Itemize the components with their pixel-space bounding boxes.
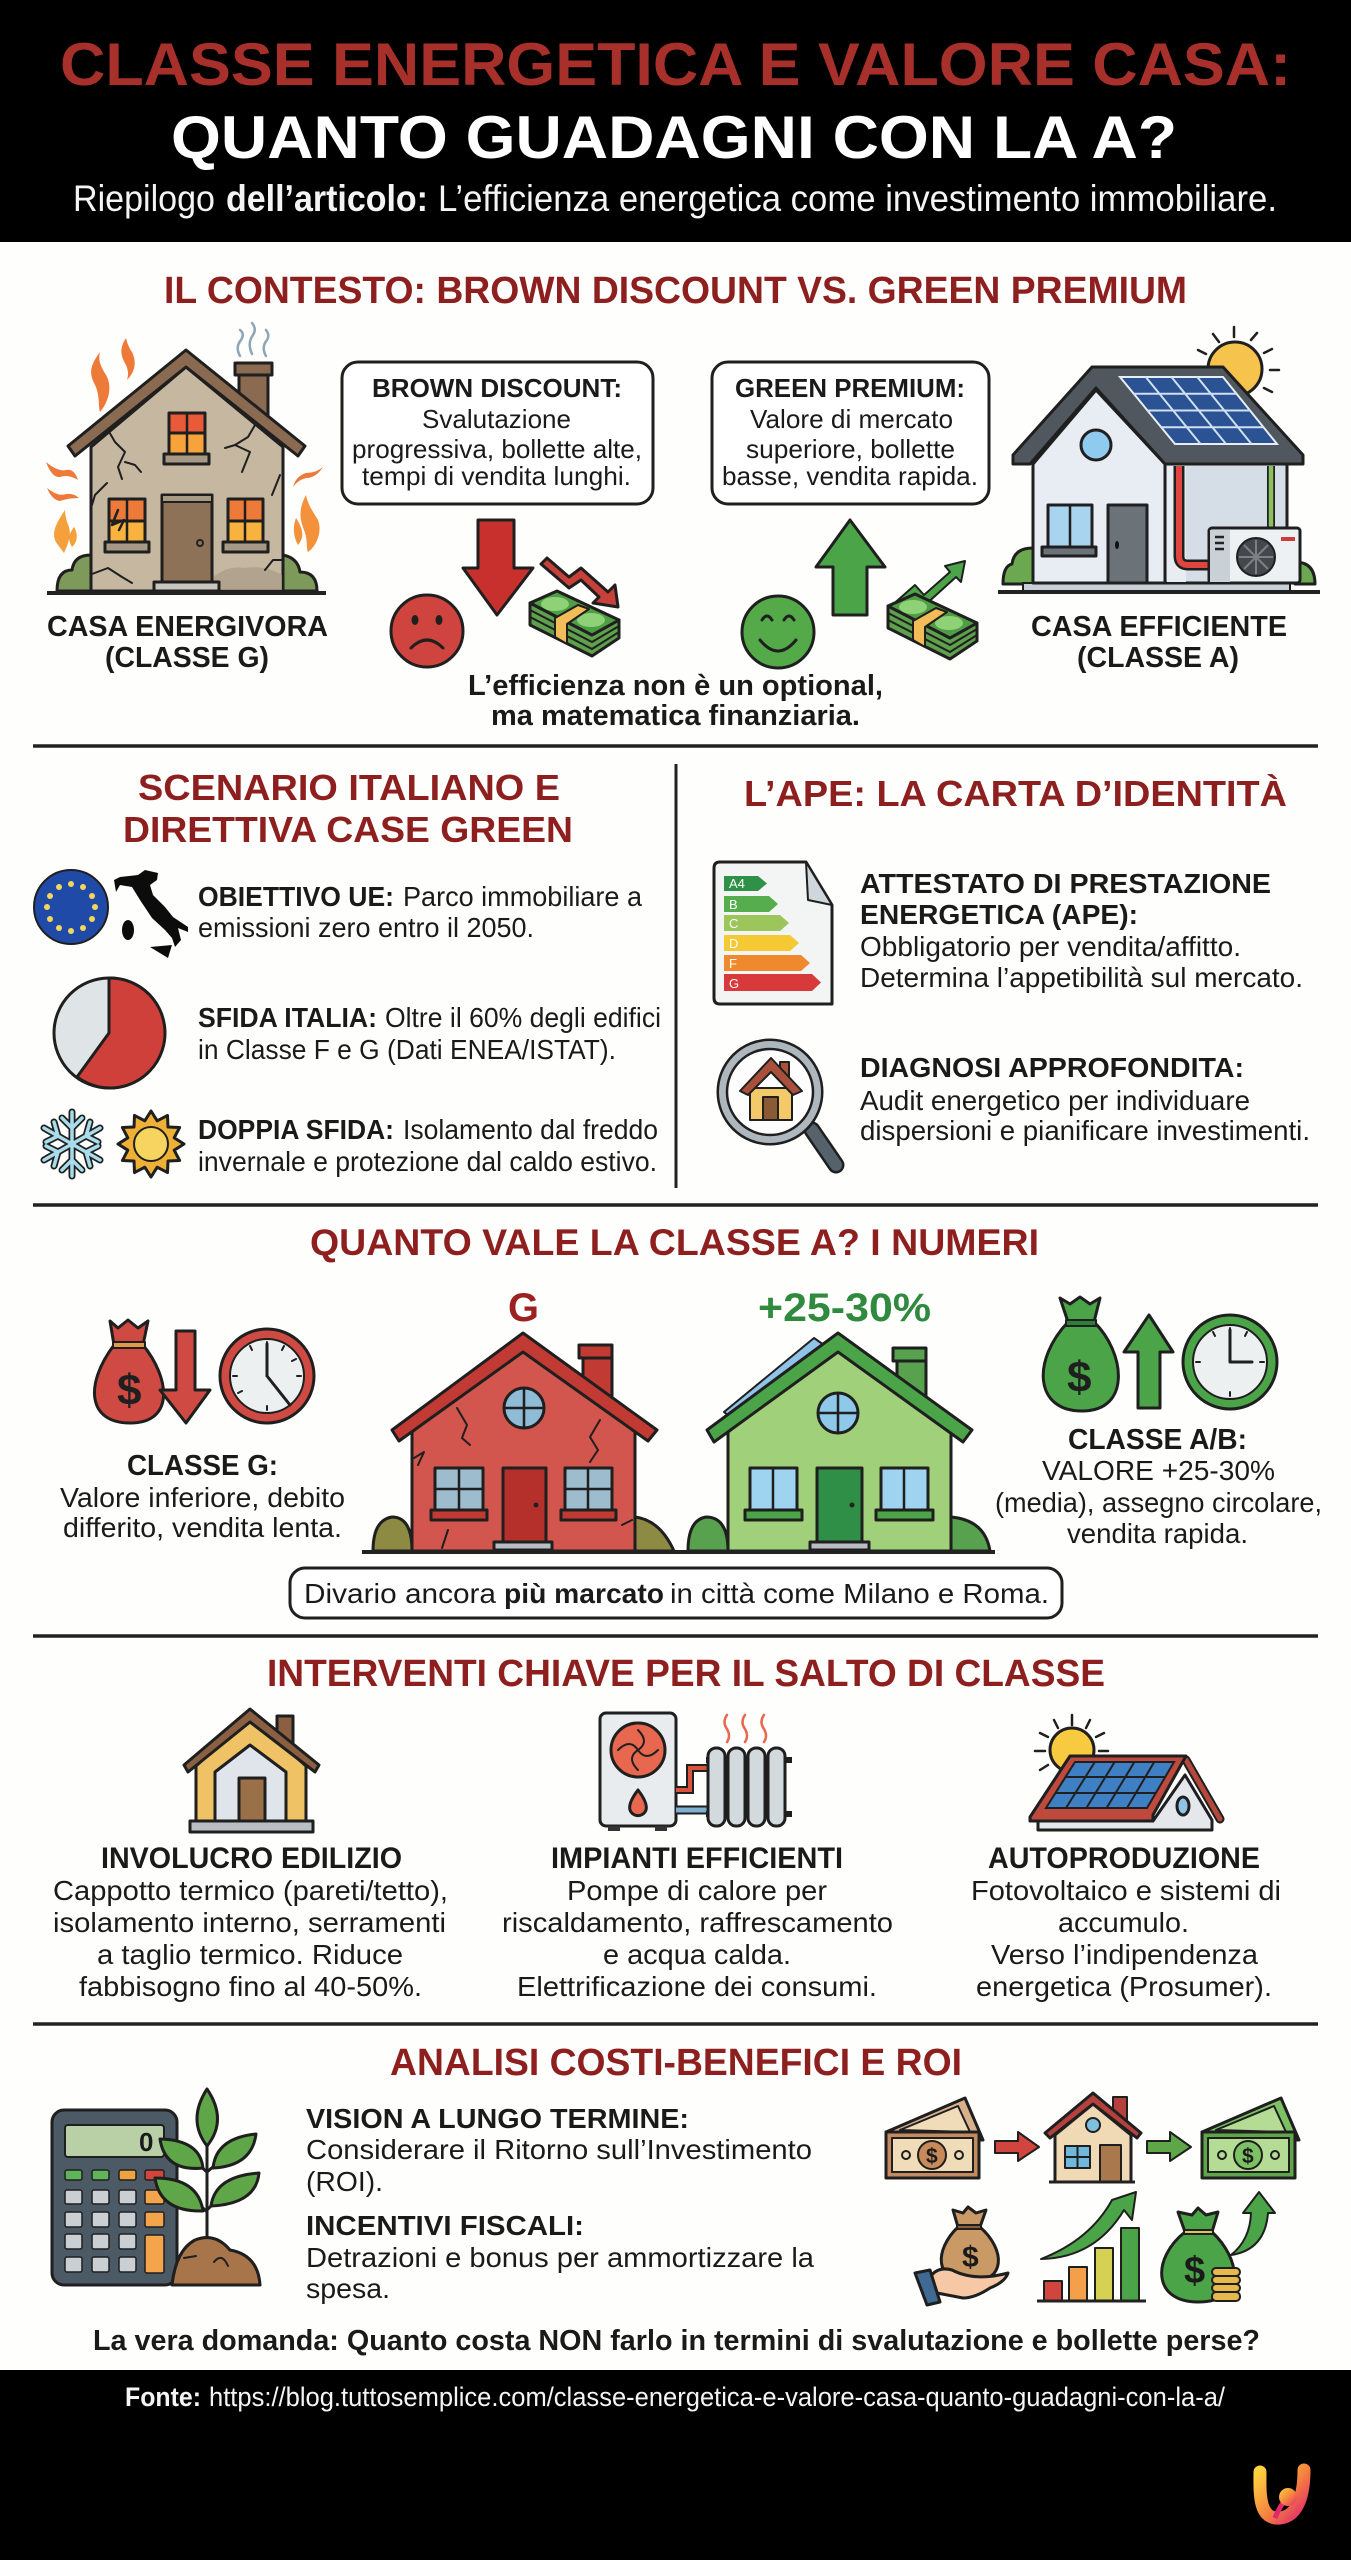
text: impianti efficienti: IMPIANTI EFFICIENTI	[551, 1842, 843, 1875]
header band	[0, 0, 1351, 242]
text: diagnosi: DIAGNOSI APPROFONDITA:	[860, 1052, 1244, 1083]
arrow: green right	[1147, 2132, 1191, 2161]
heading: scenario italiano	[123, 767, 573, 850]
icon: energy-wasting house class G	[46, 323, 326, 593]
callout: brown discount	[342, 362, 653, 504]
text: incentivi fiscali: Detrazioni e bonus per ammortizzare la	[306, 2242, 814, 2273]
text: classe A/B: CLASSE A/B:	[1068, 1424, 1247, 1456]
footer band	[0, 2370, 1351, 2560]
callout: green premium: GREEN PREMIUM:	[735, 373, 965, 403]
text: attestato: Determina l’appetibilità sul mercato.	[860, 962, 1303, 993]
heading: analisi: ANALISI COSTI-BENEFICI E ROI	[390, 2042, 962, 2084]
callout: green premium: superiore, bollette	[746, 434, 955, 464]
text: involucro edilizio: INVOLUCRO EDILIZIO	[101, 1842, 402, 1875]
heading: quanto vale: QUANTO VALE LA CLASSE A? I NUMERI	[310, 1222, 1039, 1263]
icon: energy label document: F	[729, 956, 737, 971]
icon: green banknotes: $	[1242, 2145, 1254, 2168]
icon: rising cash	[888, 561, 977, 659]
text: impianti efficienti: e acqua calda.	[603, 1939, 791, 1970]
label: casa efficiente: (CLASSE A)	[1077, 642, 1239, 674]
text: involucro edilizio: a taglio termico. Riduce	[97, 1939, 403, 1970]
icon: heat pump and radiator	[600, 1713, 792, 1831]
icon: efficient house class A	[998, 327, 1320, 592]
icon: green bag arrow clock	[1043, 1297, 1277, 1411]
text: diagnosi	[860, 1052, 1310, 1146]
arrow: red right	[995, 2132, 1039, 2161]
icon: red money bag arrow clock	[94, 1320, 314, 1423]
icon: insulated house	[184, 1709, 319, 1832]
subtitle	[73, 178, 1277, 219]
text: attestato: ATTESTATO DI PRESTAZIONE	[860, 868, 1271, 899]
text: vision a lungo termine: (ROI).	[306, 2166, 383, 2197]
text: sfida italia: SFIDA ITALIA:	[198, 1002, 377, 1033]
text: doppia sfida: invernale e protezione dal caldo estivo.	[198, 1146, 657, 1177]
icon: solar roof	[1030, 1715, 1220, 1830]
label: casa energivora	[47, 611, 328, 674]
icon: calculator and plant	[52, 2089, 260, 2285]
icon: sad face	[391, 595, 463, 667]
callout: brown discount: BROWN DISCOUNT:	[372, 373, 622, 403]
subtitle: L’efficienza energetica come investimento immobiliare.	[438, 178, 1277, 219]
text: involucro edilizio: Cappotto termico (pareti/tetto),	[53, 1875, 448, 1906]
text: impianti efficienti: Pompe di calore per	[567, 1875, 827, 1906]
label: G: G	[508, 1286, 539, 1330]
icon: magnifier on house	[718, 1040, 836, 1165]
icon: small house	[1045, 2093, 1141, 2182]
text: involucro edilizio: fabbisogno fino al 40-50%.	[79, 1971, 422, 2002]
text: classe G: Valore inferiore, debito	[60, 1482, 345, 1513]
icon: falling cash	[530, 558, 619, 656]
text: incentivi fiscali	[306, 2210, 814, 2304]
chart: rising bars	[1037, 2192, 1146, 2301]
text: classe G: CLASSE G:	[127, 1450, 278, 1482]
icon: hand holding money bag	[915, 2207, 1008, 2305]
callout: divario: più marcato	[504, 1578, 664, 1609]
text: obiettivo UE: emissioni zero entro il 2050.	[198, 912, 534, 943]
icon: green banknotes	[1202, 2098, 1299, 2178]
text: involucro edilizio	[53, 1842, 448, 2002]
icon: energy label document: D	[729, 936, 738, 951]
icon: EU flag	[34, 870, 108, 944]
text: obiettivo UE: Parco immobiliare a	[403, 881, 642, 912]
heading: ape: L’APE: LA CARTA D’IDENTITÀ	[744, 773, 1287, 814]
text: autoproduzione: Fotovoltaico e sistemi di	[971, 1875, 1281, 1906]
text: obiettivo UE: OBIETTIVO UE:	[198, 881, 394, 912]
text: impianti efficienti	[502, 1842, 893, 2002]
text: vision a lungo termine: Considerare il Ritorno sull’Investimento	[306, 2134, 812, 2165]
callout: brown discount: tempi di vendita lunghi.	[362, 461, 631, 491]
text: doppia sfida: Isolamento dal freddo	[403, 1114, 658, 1145]
text: attestato: ENERGETICA (APE):	[860, 899, 1138, 930]
callout: brown discount: progressiva, bollette alte,	[352, 434, 642, 464]
text: sfida italia: in Classe F e G (Dati ENEA/ISTAT).	[198, 1034, 616, 1065]
icon: energy label document: B	[729, 897, 738, 912]
icon: snowflake	[44, 1112, 100, 1176]
callout: green premium: Valore di mercato	[750, 404, 953, 434]
closing question: La vera domanda: Quanto costa NON farlo in termini di svalutazione e bollette perse?	[93, 2325, 1260, 2357]
icon: Italy map	[114, 870, 188, 958]
icon: spiky sun	[118, 1111, 184, 1177]
heading: scenario italiano: SCENARIO ITALIANO E	[138, 767, 560, 808]
arrow: up green	[816, 520, 885, 615]
text: autoproduzione: AUTOPRODUZIONE	[988, 1842, 1260, 1875]
label: casa energivora: (CLASSE G)	[105, 642, 269, 674]
label: casa efficiente	[1031, 611, 1287, 674]
callout: divario: in città come Milano e Roma.	[670, 1578, 1049, 1609]
takeaway: L’efficienza non è un optional,	[468, 670, 883, 702]
title line 2: QUANTO GUADAGNI CON LA A?	[171, 104, 1177, 171]
label: casa efficiente: CASA EFFICIENTE	[1031, 611, 1287, 643]
logo	[1260, 2470, 1304, 2518]
icon: green money bag with coins	[1162, 2192, 1275, 2302]
icon: energy label document: C	[729, 916, 738, 931]
text: classe A/B	[995, 1424, 1322, 1549]
label: +25-30%: +25-30%	[758, 1286, 931, 1330]
text: autoproduzione: energetica (Prosumer).	[976, 1971, 1272, 2002]
icon: brown banknotes	[886, 2098, 983, 2178]
takeaway: ma matematica finanziaria.	[491, 700, 860, 732]
text: incentivi fiscali: INCENTIVI FISCALI:	[306, 2210, 584, 2241]
callout: divario: Divario ancora	[304, 1578, 496, 1609]
text: attestato	[860, 868, 1303, 993]
chart: pie 60 percent	[54, 978, 165, 1088]
text: classe A/B: VALORE +25-30%	[1042, 1455, 1275, 1486]
takeaway	[468, 670, 883, 732]
icon: green bag arrow clock: $	[1067, 1353, 1091, 1402]
subtitle: dell’articolo:	[226, 178, 428, 219]
callout: brown discount: Svalutazione	[422, 404, 571, 434]
text: vision a lungo termine	[306, 2103, 812, 2197]
text: impianti efficienti: riscaldamento, raffrescamento	[502, 1907, 893, 1938]
icon: brown banknotes: $	[926, 2145, 938, 2168]
text: classe A/B: vendita rapida.	[1067, 1518, 1248, 1549]
heading: interventi: INTERVENTI CHIAVE PER IL SALTO DI CLASSE	[267, 1653, 1105, 1695]
icon: energy label document: G	[729, 976, 739, 991]
text: diagnosi: dispersioni e pianificare investimenti.	[860, 1115, 1310, 1146]
text: sfida italia: Oltre il 60% degli edifici	[385, 1002, 661, 1033]
callout: green premium: basse, vendita rapida.	[722, 461, 978, 491]
source line: Fonte:	[125, 2382, 201, 2412]
text: diagnosi: Audit energetico per individuare	[860, 1085, 1250, 1116]
text: autoproduzione	[971, 1842, 1281, 2002]
text: classe A/B: (media), assegno circolare,	[995, 1487, 1322, 1518]
icon: calculator and plant: 0	[139, 2127, 153, 2157]
source line: https://blog.tuttosemplice.com/classe-energetica-e-valore-casa-quanto-guadagni-con-la-a/	[209, 2382, 1225, 2412]
text: impianti efficienti: Elettrificazione dei consumi.	[517, 1971, 877, 2002]
text: incentivi fiscali: spesa.	[306, 2273, 390, 2304]
heading: scenario italiano: DIRETTIVA CASE GREEN	[123, 809, 573, 850]
arrow: down red	[463, 520, 533, 615]
text: doppia sfida	[198, 1114, 658, 1177]
text: involucro edilizio: isolamento interno, serramenti	[53, 1907, 446, 1938]
icon: happy face	[742, 596, 814, 668]
text: attestato: Obbligatorio per vendita/affitto.	[860, 931, 1241, 962]
icon: red house	[373, 1333, 674, 1551]
icon: energy label document: A4	[729, 876, 745, 891]
text: sfida italia	[198, 1002, 661, 1065]
text: vision a lungo termine: VISION A LUNGO TERMINE:	[306, 2103, 689, 2134]
text: autoproduzione: accumulo.	[1058, 1907, 1189, 1938]
text: doppia sfida: DOPPIA SFIDA:	[198, 1114, 394, 1145]
text: classe G: differito, vendita lenta.	[63, 1512, 342, 1543]
callout: divario	[290, 1568, 1062, 1618]
text: obiettivo UE	[198, 881, 642, 943]
icon: hand holding money bag: $	[962, 2241, 979, 2274]
icon: green money bag with coins: $	[1184, 2250, 1205, 2292]
callout: green premium	[712, 362, 989, 504]
heading: il contesto: IL CONTESTO: BROWN DISCOUNT VS. GREEN PREMIUM	[164, 270, 1187, 312]
text: classe G	[60, 1450, 345, 1543]
text: autoproduzione: Verso l’indipendenza	[991, 1939, 1258, 1970]
icon: green house	[362, 1333, 995, 1552]
title line 1: CLASSE ENERGETICA E VALORE CASA:	[60, 31, 1291, 98]
subtitle: Riepilogo	[73, 178, 215, 219]
icon: energy label document	[714, 862, 832, 1004]
label: casa energivora: CASA ENERGIVORA	[47, 611, 328, 643]
icon: red money bag arrow clock: $	[117, 1366, 141, 1415]
